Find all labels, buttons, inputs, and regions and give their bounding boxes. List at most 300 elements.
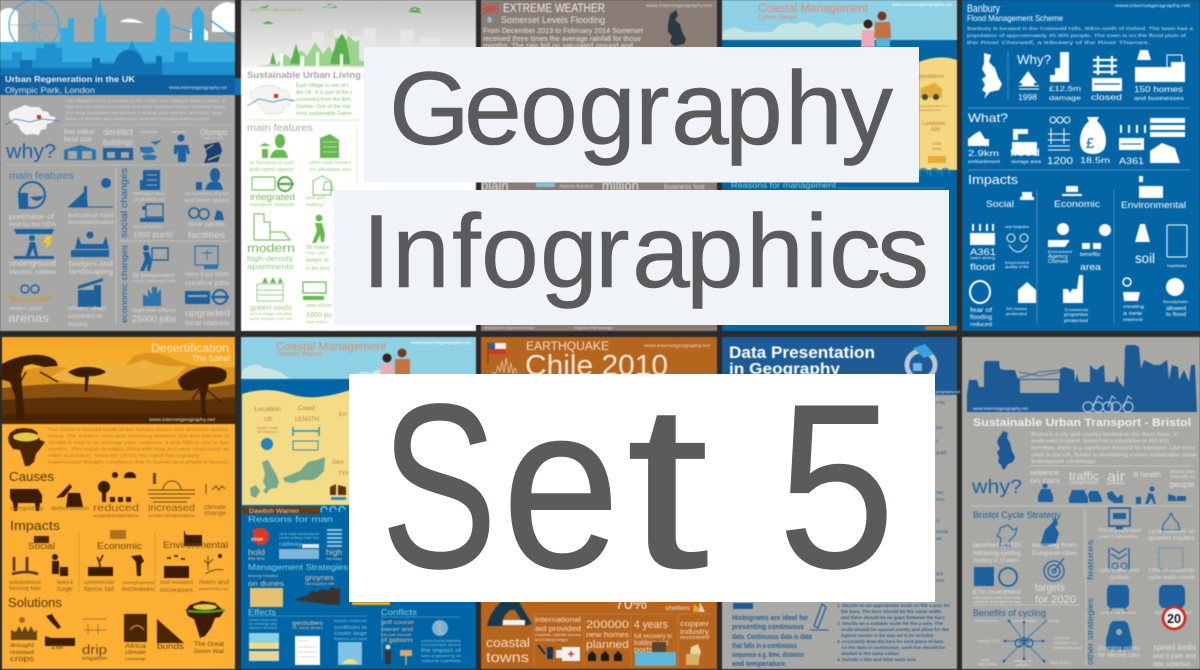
section: main features: new school for (133, 224, 163, 229)
section: features: cycle network on (1148, 529, 1195, 535)
right column fragments: evenly (936, 529, 949, 534)
section: benefits of cycling: Benefits of cycling (973, 608, 1046, 618)
text block: intro (296, 83, 353, 117)
text block: histograms (732, 613, 813, 668)
stats strip: plain (481, 178, 508, 193)
section: why: £12.5m (1049, 86, 1081, 93)
title: Banbury (967, 3, 1000, 15)
section: benefits of cycling: and mobile (978, 662, 997, 666)
main features: main features (247, 123, 313, 134)
text block: intro: most sustainable Game (296, 111, 352, 117)
panel: Coastal Management Dawlish Warren (241, 337, 476, 669)
sand and deposition column: position (919, 74, 944, 80)
section: main features: 2800 new homes (133, 191, 166, 196)
section: features: cycle each month (1148, 575, 1195, 581)
section: features: split traffic and (1099, 568, 1139, 574)
reasons row: reliance (1030, 468, 1059, 477)
section: effects: owner and (381, 627, 413, 633)
stat: copper: industry (680, 627, 709, 636)
section: main features: housing (68, 322, 88, 328)
header illustration: London skyline (0, 0, 255, 95)
section: impacts: Environmental (163, 540, 228, 550)
section: impacts: Environmental (1121, 200, 1186, 210)
section: impacts: famine & (57, 580, 73, 586)
section: effects: beach material (334, 619, 367, 623)
section: effects: environmentalists (421, 639, 461, 643)
section: solutions: Africa (125, 643, 146, 650)
url: www.internetgeography.net (411, 340, 472, 345)
section: impacts (968, 170, 1190, 328)
section: main features: converted to (68, 313, 103, 320)
section: impacts: benefits (1080, 252, 1101, 258)
section: benefits of cycling: every £1 (1055, 636, 1070, 640)
section: causes: Causes (9, 469, 55, 484)
text block: intro: converted from the Athl (296, 97, 350, 103)
section: what: 2.9km (968, 149, 999, 158)
reasons row: streets less (1170, 469, 1196, 474)
reasons row: air (1107, 469, 1126, 484)
section: main features: electric cables (9, 269, 56, 276)
section: other strategies: and 3 park and (1153, 654, 1196, 660)
icon: data ring (907, 344, 935, 379)
section: impacts: unemployment (122, 580, 155, 585)
section: solutions: zai (51, 642, 63, 651)
section: main features: shops, cafes and bars (132, 279, 176, 283)
section: benefits of cycling: safer streets (1050, 661, 1071, 665)
section: Bristol Cycle Strategy: doubling in 10 years (973, 558, 1020, 564)
strategies: groynes (305, 573, 334, 582)
section: main features: 10 hectares of park (185, 191, 230, 196)
title box: Set 5: e (502, 355, 620, 617)
right column fragments: n the (936, 400, 946, 405)
stats strip: brigades that damage (574, 325, 613, 330)
section: features: Level 2 bikeability (1098, 534, 1139, 539)
section: impacts: Social (986, 198, 1014, 209)
section: other strategies: charging points (1098, 645, 1140, 652)
strategies (248, 573, 340, 607)
text: coastal towns (486, 636, 530, 665)
main features: encourage wildlife (250, 312, 292, 316)
section: benefits of cycling: into the economy (1053, 646, 1082, 650)
section: why: 150 homes (1134, 85, 1183, 94)
text block: steps (837, 603, 950, 662)
section: other strategies: 20 (1167, 611, 1181, 626)
text block: intro: the UK. It is part of the L (296, 90, 353, 96)
section: main features: land by the ODA (9, 222, 57, 228)
section: solutions: resistant (10, 650, 35, 656)
text: international aid: aid provided (535, 624, 581, 633)
section: impacts: area (1080, 262, 1102, 273)
icon: UK map (668, 10, 686, 46)
text block: intro: The Olympic Park is located in the Lower Lea Valley in East London. It (65, 98, 226, 103)
subtitle: Chile 2010 (525, 350, 668, 382)
sand and deposition column: 400m (932, 146, 943, 151)
main features: green roofs (250, 303, 292, 312)
text block: intro (1031, 432, 1197, 465)
reasons: density (326, 556, 342, 561)
icon: bar chart and pencil (733, 603, 829, 630)
text block: steps: 1. Decide on an appropriate scale on the x-axis for (837, 603, 950, 608)
stat: 4 years: ports (634, 647, 654, 654)
section: solutions: bunds (157, 641, 184, 651)
section: impacts: properties (1064, 312, 1089, 317)
section: why: 1998 (1018, 93, 1038, 102)
section: what: 18.5m (1080, 155, 1110, 165)
section: main features: Here East 5000 (185, 272, 229, 278)
clouds and cliff (722, 22, 876, 40)
title: Sustainable Urban Living in (247, 70, 372, 80)
section: impacts: increases (122, 586, 155, 593)
reasons row: legacy benefits (203, 136, 224, 140)
text block: intro (967, 26, 1193, 46)
text block: intro: transport strategy. (1031, 459, 1097, 465)
section: solutions: drought (10, 643, 35, 649)
stat: copper (680, 619, 710, 665)
section: effects: natural habitats (421, 659, 461, 663)
title: Urban Regeneration in the UK (5, 74, 136, 84)
section: benefits of cycling: tourist income (975, 619, 999, 623)
text block: intro (65, 98, 227, 121)
text block: intro: areas of derelict and underused land and polluted watercourses. (65, 116, 211, 121)
title box: Geography: Geography (389, 51, 893, 167)
section: solutions: The Great (194, 641, 224, 648)
section: benefits of cycling: reduce obesity (1012, 619, 1037, 623)
icon: London map (247, 85, 295, 114)
icon: London map (5, 105, 60, 135)
section: what: storage area (1011, 159, 1042, 164)
section: main features: purchase of (9, 212, 55, 221)
section: effects: hard engineering on (421, 654, 461, 658)
section: impacts: a new (1123, 311, 1143, 317)
reasons: high (326, 548, 342, 557)
sand and deposition column: Landslide (922, 121, 946, 127)
section: causes: deforestation (51, 506, 89, 512)
section: effects: create large (334, 631, 367, 637)
section: main features: modern sports (9, 306, 43, 312)
section: main features: bridges and (69, 259, 113, 268)
stats strip (481, 178, 705, 330)
reasons row: traffic (1069, 469, 1099, 483)
section: effects: dunes fenced (249, 626, 277, 630)
text block: intro: Games. One of the mai (296, 104, 351, 110)
section: impacts: commercial (84, 580, 114, 586)
main features: modern (247, 241, 295, 255)
text block: steps: scale should be spaced evenly and allow for the (841, 627, 949, 632)
main features: apartments (247, 262, 294, 271)
section: impacts: farming falls (9, 586, 41, 592)
section: benefits of cycling: reduced air (1013, 659, 1033, 663)
heading: management strategies: Management Strategies (248, 562, 348, 572)
reasons row: buildings (103, 138, 133, 147)
section: other strategies: rapid transit buses (1154, 610, 1192, 615)
section: impacts (9, 519, 229, 594)
main features: keeps m (306, 258, 329, 264)
text block: intro: the River Cherwell, a tributary of the River Thames. (967, 40, 1150, 46)
sand and deposition column: 2008 (932, 141, 942, 146)
section: Bristol Cycle Strategy: following cycling (973, 551, 1021, 557)
main features: 2800 new homes (309, 160, 352, 166)
section: impacts: open during (970, 256, 995, 260)
text block: intro: population of approximately 45 000 people. The town is on the flood plain of (967, 33, 1187, 39)
strategies: halt longshore drift (305, 582, 334, 586)
sand panel: location, coast, maps: LENGTH (295, 417, 319, 423)
reasons row (972, 466, 1196, 506)
section: Bristol Cycle Strategy: Bristol Cycle Strategy (973, 510, 1062, 520)
section: benefits of cycling: quiet (981, 658, 990, 662)
title box: Infographics: Infographics (362, 194, 929, 310)
title box: Set 5: 5 (778, 355, 895, 617)
text block: intro: cities in the UK, Bristol is developing a more sustainable urban (1031, 452, 1197, 458)
title: Sustainable Urban Transport - Bristol (973, 417, 1191, 429)
url: www.internetgeography.net (892, 2, 953, 7)
text block: steps: 3. Accurately draw the bars for each piece of data. (837, 639, 944, 644)
section: impacts: Cherwell (1048, 259, 1068, 265)
right column fragments: from (936, 497, 945, 502)
section: main features: decontaminated (68, 220, 114, 226)
reasons row: accessible (140, 130, 158, 134)
section: other strategies: for electric cars (1098, 653, 1140, 659)
text: international aid: hospitals, satellite phones (535, 633, 581, 637)
text: international aid: and floating bridges (535, 638, 568, 642)
reasons row: deprived (172, 130, 187, 134)
section: impacts: reservoir (1123, 317, 1144, 322)
section: other strategies: ride schemes (1153, 662, 1191, 668)
reasons row: derelict (103, 127, 134, 137)
section: benefits of cycling: exercise (1045, 619, 1059, 623)
right column fragments (936, 400, 949, 583)
stats strip: million (602, 178, 639, 193)
icon: union flag (482, 3, 499, 23)
section: main features (6, 167, 231, 328)
url: www.internetgeography.net (646, 3, 713, 8)
section: effects: concerned about (421, 643, 462, 647)
stat: copper: recovered (680, 635, 709, 641)
strategies: on dunes (248, 579, 284, 588)
sand panel: location, coast, maps: Ero (339, 412, 347, 418)
main features: new schoo (306, 303, 332, 309)
reasons row: friendly to (1170, 474, 1196, 479)
icon: seismograph (491, 358, 517, 374)
right column fragments: graph (936, 450, 947, 455)
section: what: 1200 (1047, 156, 1074, 167)
right column fragments: hart, (936, 490, 944, 495)
section: what: A361 (1119, 156, 1144, 166)
reasons (248, 528, 342, 562)
section: impacts: hunger (57, 586, 74, 593)
url: www.internetgeography.net (973, 406, 1029, 411)
reasons row: congestion (1069, 480, 1099, 486)
section: causes: increased (148, 503, 195, 514)
section: causes: ocean temperature (148, 513, 195, 519)
section: impacts: A361 (970, 247, 996, 257)
section: impacts: rivers and (199, 579, 229, 586)
text block: steps: shaded in the same colour (841, 651, 899, 656)
header illustration: savanna (0, 337, 235, 424)
heading: why: why? (971, 477, 1022, 498)
section: effects: golf course (381, 620, 414, 626)
stat: copper: copper (680, 619, 710, 628)
text block: histograms: sequence e.g. time, distance (732, 650, 804, 659)
right column fragments: and (936, 571, 944, 576)
strategies: fencing installed (248, 574, 278, 578)
section: effects: the impact of (421, 648, 462, 654)
section: impacts: new footpaths (1005, 225, 1029, 229)
stat: 200000 new homes (586, 619, 629, 661)
section: causes: overgrazing (10, 506, 43, 512)
section: what: £ (1086, 135, 1095, 152)
reasons: sea wall destroyed (279, 532, 319, 536)
sand panel: location, coast, maps: Location (254, 407, 281, 413)
section: causes: change (204, 511, 227, 517)
stats strip: homes flooded (560, 184, 593, 190)
subtitle: in Geography (729, 361, 840, 378)
stat: 200000 new homes: new homes (586, 630, 629, 639)
title box: Set 5 (349, 355, 935, 617)
icon: people (861, 12, 891, 47)
text block: intro: From December 2013 to February 2014 Somerset (483, 28, 643, 35)
section: impacts: waterholes dry (199, 587, 229, 591)
section: impacts: soil erosion (160, 580, 193, 586)
section: features: features (1085, 540, 1095, 580)
stat: 200000 new homes: 200000 (586, 619, 629, 631)
section: solutions: climate (125, 650, 146, 656)
reasons: hold (248, 548, 265, 557)
sand panel: location, coast, maps: UK (264, 417, 272, 423)
text: coastal towns: coastal (486, 636, 530, 650)
section: impacts: Social (28, 540, 55, 551)
section: Bristol Cycle Strategy: £7m investment (973, 589, 1021, 596)
reasons row: ill health (1133, 472, 1161, 479)
url: www.internetgeography.net (149, 417, 216, 422)
section: impacts: Environment (1048, 249, 1073, 254)
section: features: other strategies (1085, 598, 1095, 665)
section: impacts: allowed (1166, 306, 1186, 312)
section: Bristol Cycle Strategy (972, 509, 1084, 606)
main features: large health c (306, 320, 329, 324)
sand panel: location, coast, maps: TYP (338, 471, 349, 477)
title: Coastal Management (758, 3, 869, 15)
section: impacts: protected (1006, 312, 1027, 316)
reasons row (5, 125, 230, 165)
section: effects: Effects (248, 607, 276, 617)
section: features: cyclists (1109, 575, 1129, 581)
stats strip: business lost (664, 184, 705, 191)
section: effects: Conflicts (381, 607, 417, 617)
main features (247, 120, 360, 324)
text block: intro: received three times the average rainfall for those (483, 36, 641, 43)
section: main features: creative jobs (185, 280, 230, 287)
section: what (968, 111, 1185, 167)
stat: 4 years: full recovery to (634, 633, 672, 640)
url: www.internetgeography.net (644, 343, 711, 348)
section: features (1085, 508, 1196, 665)
heading: reasons for management: Reasons for man (248, 515, 333, 524)
section: impacts: fear of (970, 307, 992, 314)
right column fragments: y (936, 438, 939, 443)
strip above text: 70% (615, 596, 647, 613)
panel: Coastal Management Lyme Regis (722, 0, 957, 331)
section: impacts: protected (1064, 318, 1089, 323)
reasons row: people (1170, 479, 1195, 489)
text block: intro: Bristol is a city and country located on the River Avon, in (1031, 432, 1178, 438)
section: impacts: Economic (97, 540, 142, 551)
section: effects: continues to (334, 625, 367, 631)
text: international aid: international (535, 615, 581, 624)
text: international aid (535, 615, 581, 642)
section: why (968, 50, 1190, 108)
subtitle: Flood Management Scheme (967, 14, 1063, 23)
icons: aid (538, 645, 580, 661)
section: impacts: flooding (970, 315, 992, 321)
section: main features: landscaping (69, 267, 113, 276)
main features: 1800 pu (306, 310, 332, 319)
section: effects: of gabions (381, 638, 413, 644)
section: solutions: Green Wall (194, 649, 224, 655)
sand panel: location, coast, maps (242, 390, 350, 505)
url: www.internetgeography.net (1115, 3, 1191, 8)
title: Desertification (151, 341, 229, 355)
stat: 4 years: buildings and (634, 640, 668, 647)
text block: intro: experienced drought conditions due to human and physical factors. (48, 460, 229, 464)
section: main features: athletes' village (68, 306, 106, 312)
subtitle: Somerset Levels Flooding (501, 15, 605, 25)
section: other strategies: speed limits (1153, 643, 1196, 652)
text: shelters: shelters (665, 605, 691, 612)
section: Bristol Cycle Strategy: education and 200 mile (973, 596, 1021, 600)
section: solutions: exchange (125, 656, 147, 661)
section: impacts: farms fail (84, 586, 115, 593)
right column fragments: sel. (936, 536, 943, 541)
icon: UK map (997, 431, 1015, 470)
text block: steps: As the data is continuous, each bar should be (841, 645, 945, 650)
text block: histograms: presenting continuous (732, 622, 804, 631)
text block: intro: months. This region provides Africa with food and cash crops such as (48, 446, 230, 452)
text block: intro (48, 427, 230, 464)
text block: intro (483, 28, 643, 50)
section: main features: underground (9, 259, 56, 268)
section: solutions: irrigation (82, 656, 107, 662)
section: effects: for recharge and (249, 622, 277, 626)
section: Bristol Cycle Strategy: learning from (1032, 543, 1077, 549)
section: main features: social changes (119, 167, 129, 238)
heading: reasons for management: Reasons for management (731, 180, 837, 190)
section: Bristol Cycle Strategy: network and right of way (973, 600, 1021, 604)
text: coastal towns: towns (486, 649, 529, 665)
subtitle: Lyme Regis (758, 15, 798, 21)
section: benefits of cycling: reduces CO2 (977, 639, 999, 643)
title: EXTREME WEATHER (503, 1, 605, 15)
section: what: flood (1010, 148, 1040, 159)
icon: people (380, 348, 410, 379)
panel: Desertification The Sahel (0, 337, 235, 669)
text block: histograms: that falls in a continuous (732, 641, 797, 650)
text block: steps: highest number in the data set to be included. (841, 633, 934, 638)
section: impacts: increases (160, 587, 194, 594)
section: causes: evapotranspiration (93, 513, 139, 519)
section: main features: high rise offices (132, 308, 176, 314)
text block: intro: months. The rain fell on saturated ground and (483, 43, 633, 50)
section: effects: full scale removal (381, 633, 411, 637)
right column fragments: or (936, 518, 940, 523)
panel: Extreme Weather Somerset Levels (481, 0, 717, 331)
section: causes: climate (204, 505, 227, 511)
section: impacts: reduced (970, 322, 992, 328)
section: impacts: Impacts (10, 519, 60, 533)
section: main features: facilities (188, 230, 226, 240)
section: main features: local stations (185, 320, 231, 327)
panel: Sustainable Urban Living (241, 0, 476, 331)
text block: intro: south-west England. Bristol has a population of 463,400, (1031, 438, 1170, 444)
